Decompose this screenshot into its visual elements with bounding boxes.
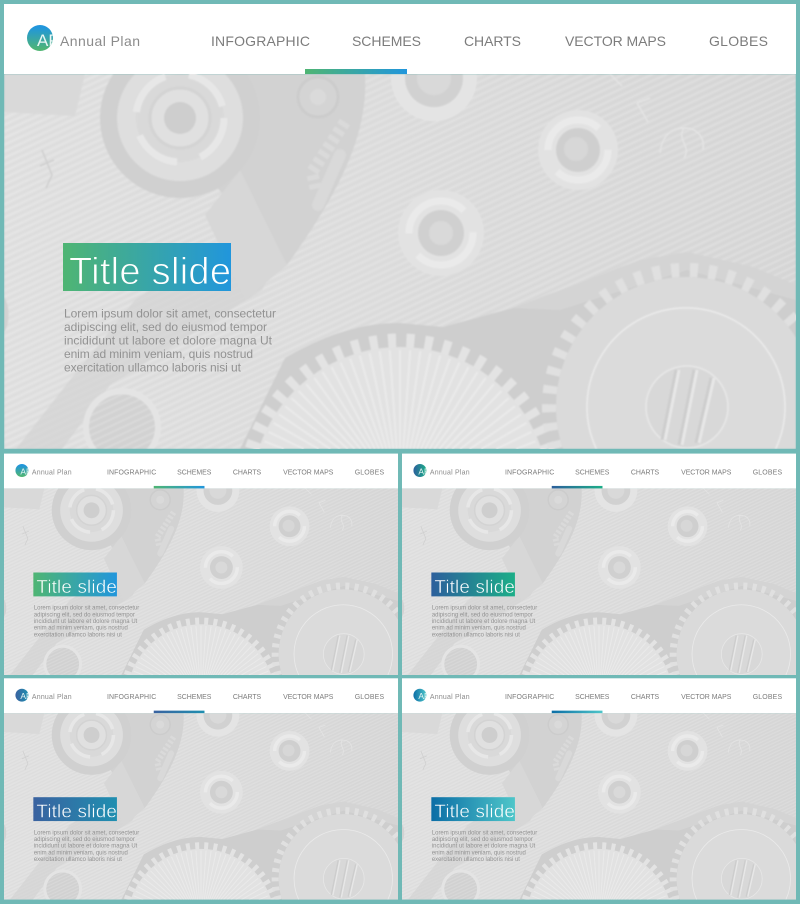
panel: main title slide: [4, 4, 796, 449]
icon: logo circle: [413, 464, 426, 477]
nav items: SCHEMES: [575, 694, 610, 701]
body text: incididunt ut labore et dolore magna Ut: [432, 619, 536, 625]
nav items: GLOBES: [753, 694, 782, 701]
nav items: VECTOR MAPS: [283, 694, 334, 701]
title banner: Title slide: [36, 802, 117, 823]
title banner: Title slide: [434, 577, 515, 598]
panel: thumbnail slide green-blue: [4, 454, 398, 675]
body text: adipiscing elit, sed do eiusmod tempor: [432, 837, 533, 843]
nav items: SCHEMES: [177, 694, 212, 701]
body text: incididunt ut labore et dolore magna Ut: [34, 619, 138, 625]
body text: enim ad minim veniam, quis nostrud: [34, 850, 128, 856]
logo label: Annual Plan: [32, 469, 72, 476]
body text: [432, 830, 537, 863]
body text: [432, 606, 537, 638]
navigation header: [402, 454, 796, 488]
title banner: Title slide: [36, 577, 117, 598]
body text: exercitation ullamco laboris nisi ut: [432, 632, 520, 638]
body text: Lorem ipsum dolor sit amet, consectetur: [34, 606, 139, 612]
nav items: GLOBES: [355, 694, 384, 701]
photo background: [4, 713, 398, 900]
body text: exercitation ullamco laboris nisi ut: [34, 632, 122, 638]
body text: exercitation ullamco laboris nisi ut: [64, 360, 242, 374]
body text: Lorem ipsum dolor sit amet, consectetur: [64, 306, 276, 320]
nav items: [505, 694, 782, 701]
icon: logo circle: [15, 688, 28, 702]
active nav underline: [154, 711, 204, 713]
nav items: SCHEMES: [575, 469, 610, 476]
navigation header: [4, 4, 796, 74]
nav items: CHARTS: [233, 694, 262, 701]
icon: logo circle: AP: [20, 691, 32, 701]
logo label: Annual Plan: [430, 469, 470, 476]
photo background: [402, 713, 796, 900]
nav items: [107, 694, 384, 701]
icon: logo circle: [27, 25, 53, 51]
body text: Lorem ipsum dolor sit amet, consectetur: [432, 830, 537, 836]
icon: logo circle: AP: [20, 466, 32, 476]
nav items: [505, 469, 782, 476]
photo background: [402, 488, 796, 675]
nav items: CHARTS: [631, 694, 660, 701]
icon: logo circle: AP: [37, 31, 60, 50]
body text: Lorem ipsum dolor sit amet, consectetur: [432, 606, 537, 612]
nav items: SCHEMES: [177, 469, 212, 476]
body text: exercitation ullamco laboris nisi ut: [432, 857, 520, 863]
body text: adipiscing elit, sed do eiusmod tempor: [64, 320, 267, 334]
body text: adipiscing elit, sed do eiusmod tempor: [34, 837, 135, 843]
photo background: watch gears: [4, 74, 796, 449]
logo label: Annual Plan: [32, 694, 72, 701]
title banner: Title slide: [69, 251, 231, 293]
icon: logo circle: AP: [418, 691, 430, 701]
navigation header: [4, 678, 398, 713]
body text: enim ad minim veniam, quis nostrud: [432, 850, 526, 856]
nav items: [211, 33, 768, 49]
body text: enim ad minim veniam, quis nostrud: [34, 626, 128, 632]
nav items: INFOGRAPHIC: [211, 33, 310, 49]
nav items: INFOGRAPHIC: [107, 694, 156, 701]
active nav underline: [552, 486, 602, 488]
nav items: GLOBES: [355, 469, 384, 476]
body text: incididunt ut labore et dolore magna Ut: [34, 844, 138, 850]
active nav underline: [305, 69, 407, 74]
body text: incididunt ut labore et dolore magna Ut: [432, 844, 536, 850]
nav items: VECTOR MAPS: [565, 33, 666, 49]
active nav underline: [552, 711, 602, 713]
nav items: SCHEMES: [352, 33, 421, 49]
nav items: CHARTS: [233, 469, 262, 476]
body text: enim ad minim veniam, quis nostrud: [432, 626, 526, 632]
body text: adipiscing elit, sed do eiusmod tempor: [432, 612, 533, 618]
body text: incididunt ut labore et dolore magna Ut: [64, 334, 273, 348]
body text: Lorem ipsum dolor sit amet, consectetur: [34, 830, 139, 836]
body text: enim ad minim veniam, quis nostrud: [64, 347, 253, 361]
icon: logo circle: [413, 688, 426, 702]
nav items: GLOBES: [709, 33, 768, 49]
body text: exercitation ullamco laboris nisi ut: [34, 857, 122, 863]
logo label: Annual Plan: [430, 694, 470, 701]
body text: [34, 830, 139, 863]
nav items: [107, 469, 384, 476]
body text: [64, 306, 276, 374]
nav items: INFOGRAPHIC: [505, 694, 554, 701]
panel: thumbnail slide navy-green: [402, 454, 796, 675]
title banner: Title slide: [434, 802, 515, 823]
nav items: GLOBES: [753, 469, 782, 476]
nav items: CHARTS: [631, 469, 660, 476]
active nav underline: [154, 486, 204, 488]
panel: thumbnail slide navy-blue: [4, 678, 398, 900]
nav items: VECTOR MAPS: [681, 469, 732, 476]
nav items: INFOGRAPHIC: [107, 469, 156, 476]
panel: thumbnail slide ocean-teal: [402, 678, 796, 900]
navigation header: [4, 454, 398, 488]
nav items: VECTOR MAPS: [283, 469, 334, 476]
icon: logo circle: [15, 464, 28, 477]
icon: logo circle: AP: [418, 466, 430, 476]
nav items: CHARTS: [464, 33, 521, 49]
navigation header: [402, 678, 796, 713]
body text: adipiscing elit, sed do eiusmod tempor: [34, 612, 135, 618]
nav items: INFOGRAPHIC: [505, 469, 554, 476]
nav items: VECTOR MAPS: [681, 694, 732, 701]
body text: [34, 606, 139, 638]
photo background: [4, 488, 398, 675]
logo label: Annual Plan: [60, 33, 140, 49]
